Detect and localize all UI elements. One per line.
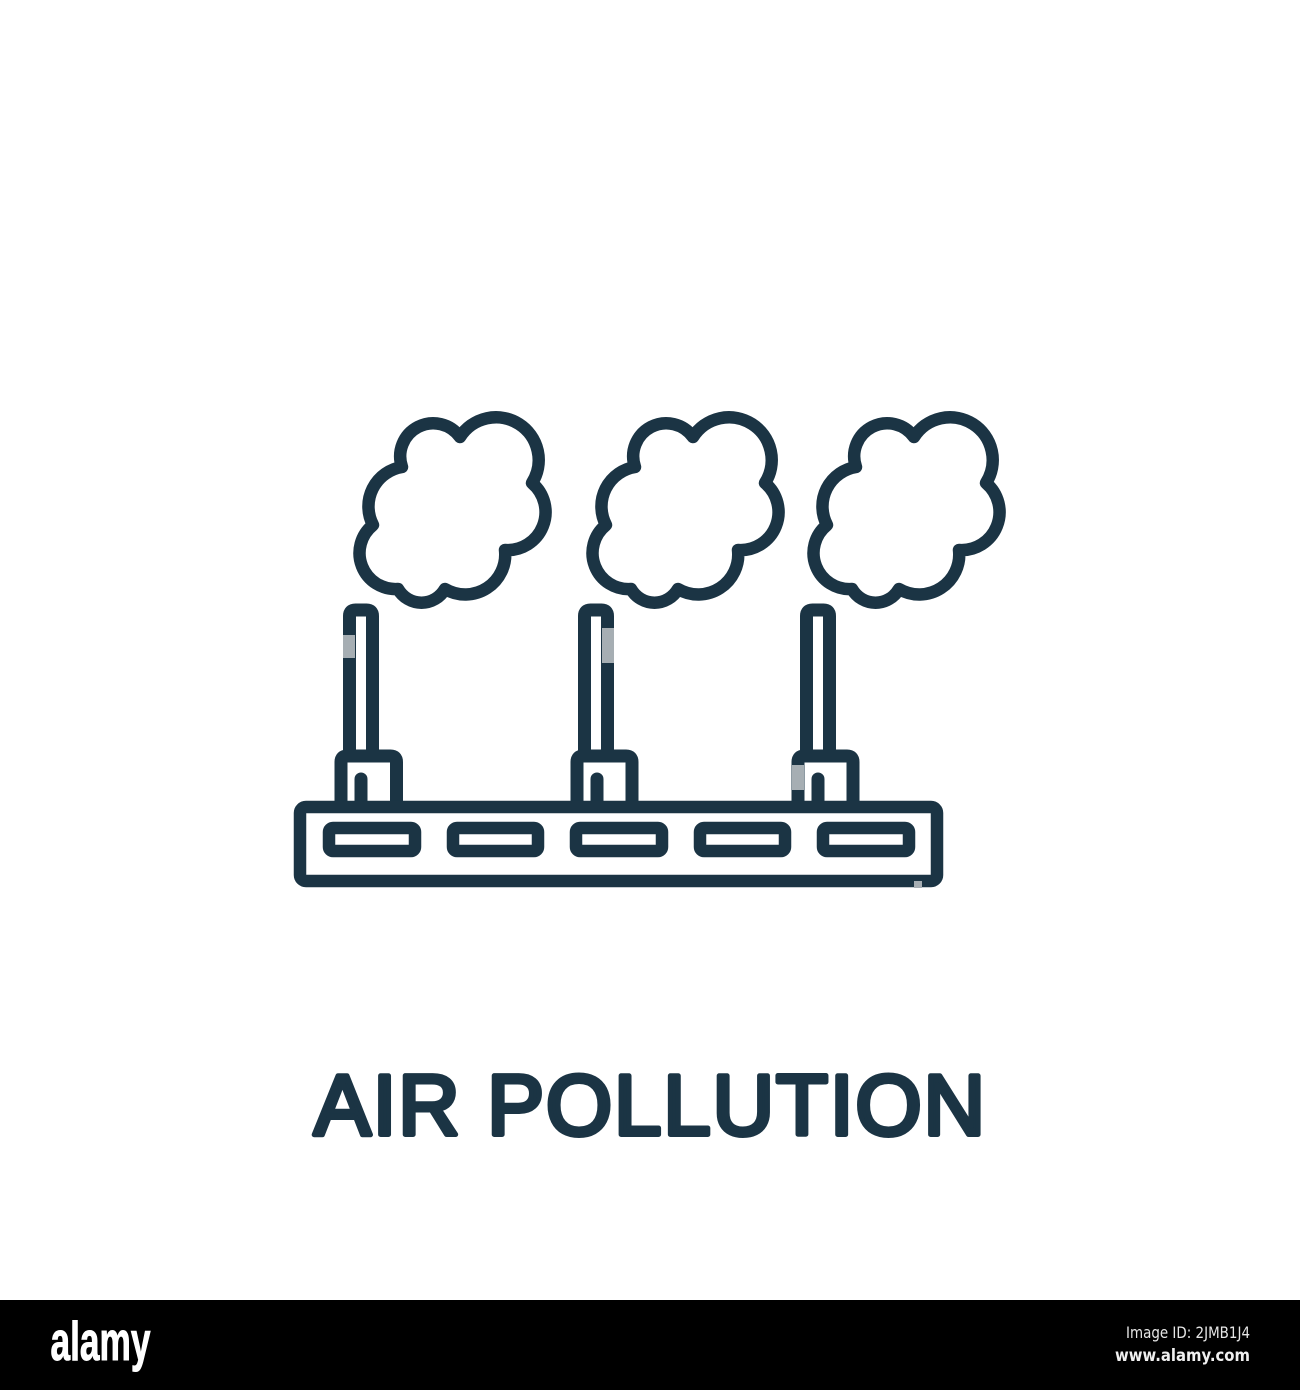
icon: chimney 3 xyxy=(798,610,853,802)
footer bar xyxy=(0,1300,1300,1390)
icon: factory with smoke xyxy=(300,417,1000,881)
icon: chimney 2 xyxy=(577,610,632,802)
icon: smoke cloud 1 xyxy=(360,417,546,603)
icon: smoke cloud 3 xyxy=(814,417,1000,603)
icon: chimney 1 xyxy=(341,610,396,802)
icon: factory building base xyxy=(300,807,937,881)
footer website: www.alamy.com xyxy=(1115,1346,1250,1366)
title: air pollution: AIR POLLUTION xyxy=(314,1058,985,1154)
footer logo: alamy: alamy xyxy=(50,1310,151,1372)
footer image id: Image ID: 2JMB1J4 xyxy=(1126,1323,1250,1342)
watermark fragments over the icon xyxy=(343,628,922,888)
icon: smoke cloud 2 xyxy=(593,417,779,603)
